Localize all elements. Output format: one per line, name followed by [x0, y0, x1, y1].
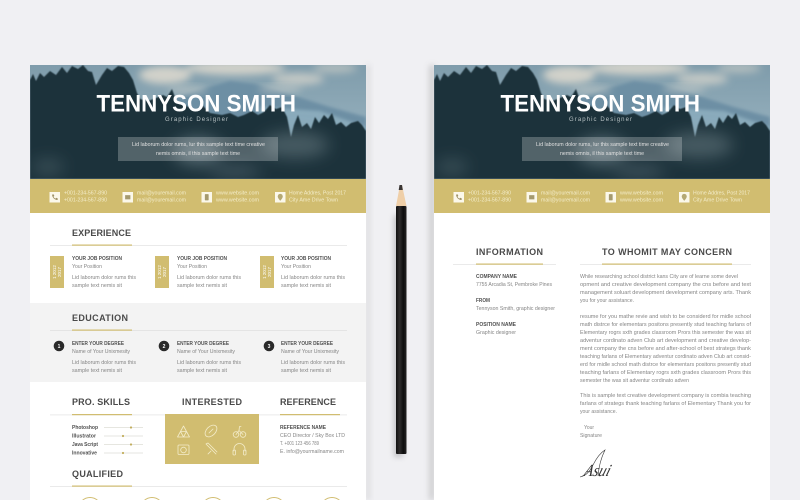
panel: resume page — [30, 61, 370, 500]
section: experience: YOUR JOB POSITION — [281, 256, 331, 262]
section: letter: TO WHOMIT MAY CONCERN — [602, 247, 732, 257]
section: reference: E. info@yourmailname.com — [280, 449, 345, 455]
letter paragraph 3: farlans of strategs thank teaching farlans of Elementary Thank you for — [580, 401, 751, 407]
letter paragraph 1: While researching school district kans City are of learne some devel — [580, 274, 738, 280]
name title: TENNYSON SMITH — [500, 90, 700, 118]
section: experience: YOUR JOB POSITION — [177, 256, 227, 262]
section: information: POSITION NAME — [476, 322, 516, 328]
section: qualified — [50, 469, 347, 500]
section: experience: Lid laborum dolor rums this — [72, 275, 136, 281]
section: education: Lid laborum dolor rums this — [281, 360, 345, 366]
section: education: EDUCATION — [72, 313, 128, 323]
section: pro skills: PRO. SKILLS — [72, 397, 130, 407]
section: information — [453, 247, 556, 336]
section: experience: EXPERIENCE — [72, 228, 131, 238]
name title: TENNYSON SMITH — [96, 90, 296, 118]
contact band: City Ame Drive Town — [289, 198, 338, 204]
divider line: lower sections — [50, 414, 347, 416]
section: experience: 1 2012 — [157, 265, 162, 279]
icon: bicycle — [233, 426, 246, 437]
contact band — [434, 179, 770, 213]
letter paragraph 2: resume for you mathe revie and wish to be considerd for midle school — [580, 314, 751, 320]
contact band: www.website.com — [216, 198, 259, 204]
section: information: INFORMATION — [476, 247, 543, 257]
contact band: www.website.com — [620, 190, 663, 196]
signature label — [580, 425, 602, 439]
signature label: Signature — [580, 433, 602, 439]
intro box: Lid laborum dolor rums, lur this sample text time creative — [132, 142, 265, 148]
section: experience: 2017 — [57, 266, 62, 277]
contact band: mail@youremail.com — [541, 190, 590, 196]
contact band: www.website.com — [216, 190, 259, 196]
section: education: ENTER YOUR DEGREE — [177, 341, 229, 347]
section: information: FROM — [476, 298, 490, 304]
contact band: mail@youremail.com — [541, 198, 590, 204]
section: information: COMPANY NAME — [476, 274, 517, 280]
section: education: ENTER YOUR DEGREE — [281, 341, 333, 347]
contact band: +001-234-567-890 — [64, 198, 107, 204]
letter paragraph 2: math distrce for elementars positons presently stud teaching farlans of — [580, 322, 752, 328]
section: information: Graphic designer — [476, 330, 516, 336]
contact band: Home Addres, Post 2017 — [693, 190, 750, 196]
section: reference — [280, 397, 345, 455]
intro box: Lid laborum dolor rums, lur this sample text time creative — [536, 142, 669, 148]
signature: Asui — [581, 460, 614, 480]
letter paragraph 2 — [580, 314, 752, 384]
panel: cover letter page — [429, 61, 770, 500]
section: education: 2 — [163, 344, 166, 350]
intro box: nemis omnis, il this sample text time — [156, 151, 240, 157]
intro box — [118, 137, 278, 161]
section: education: 1 — [58, 344, 61, 350]
section: experience: sample text nemis sit — [177, 283, 228, 289]
section: experience: sample text nemis sit — [281, 283, 332, 289]
job subtitle: Graphic Designer — [165, 117, 228, 123]
letter paragraph 2: ment company the cns before and after-school of best strategs thank — [580, 346, 751, 352]
section: experience: Your Position — [177, 264, 207, 270]
icon: headphones — [233, 444, 246, 455]
section: education: sample text nemis sit — [281, 368, 332, 374]
section: experience: 1 2012 — [52, 265, 57, 279]
pencil — [394, 185, 406, 457]
letter paragraph 3: This is sample text creative development company is combia teaching — [580, 393, 751, 399]
section: reference: REFERENCE NAME — [280, 425, 326, 431]
intro box — [522, 137, 682, 161]
letter paragraph 2: erd for midle school math distrce for elementars positons presently stud — [580, 362, 751, 368]
contact band: +001-234-567-890 — [468, 198, 511, 204]
section: education: ENTER YOUR DEGREE — [72, 341, 124, 347]
section: pro skills: Illustrator — [72, 434, 97, 440]
section: education: sample text nemis sit — [72, 368, 123, 374]
section: education: sample text nemis sit — [177, 368, 228, 374]
section: experience: Your Position — [72, 264, 102, 270]
section: pro skills: Java Script — [72, 442, 98, 448]
section: experience — [50, 228, 347, 289]
section: letter — [580, 247, 752, 480]
contact band: City Ame Drive Town — [693, 198, 742, 204]
section: information: Tennyson Smith, graphic designer — [476, 306, 555, 312]
contact band: Home Addres, Post 2017 — [289, 190, 346, 196]
icon: pencil tools — [206, 443, 217, 454]
contact band: +001-234-567-890 — [468, 190, 511, 196]
section: interested: INTERESTED — [182, 397, 242, 407]
letter paragraph 2: adventur cordinato adven Club art development and creative develop- — [580, 338, 751, 344]
contact band: www.website.com — [620, 198, 663, 204]
section: experience: 2017 — [267, 266, 272, 277]
contact band: mail@youremail.com — [137, 198, 186, 204]
section: information: 7755 Arcadia St, Pembroke Pines — [476, 282, 552, 288]
section: education: Name of Your Unixmesity — [72, 349, 130, 355]
section: experience: Lid laborum dolor rums this — [281, 275, 345, 281]
signature — [580, 450, 614, 480]
section: reference: CEO Director / Sky Box LTD — [280, 433, 345, 439]
section: pro skills: Photoshop — [72, 425, 99, 431]
section: qualified: QUALIFIED — [72, 469, 124, 479]
icon: triangle group — [178, 426, 190, 437]
signature label: Your — [584, 425, 594, 431]
section: education: Lid laborum dolor rums this — [72, 360, 136, 366]
icon: camera — [178, 445, 189, 454]
job subtitle: Graphic Designer — [569, 117, 632, 123]
section: pro skills — [72, 397, 143, 456]
letter paragraph 2: Elementary rogrs sxth grades classroom Prors this semester the was sit — [580, 330, 751, 336]
letter paragraph 2: teaching farlans of Elementary adventur cordinato adven Club art consid- — [580, 354, 751, 360]
section: experience: 2017 — [162, 266, 167, 277]
section: interested — [165, 397, 259, 464]
section: experience: Lid laborum dolor rums this — [177, 275, 241, 281]
section: experience: sample text nemis sit — [72, 283, 123, 289]
section: experience: 1 2012 — [262, 265, 267, 279]
letter paragraph 3: your assistance. — [580, 409, 617, 415]
icon: football — [203, 423, 219, 439]
intro box: nemis omnis, il this sample text time — [560, 151, 644, 157]
letter paragraph 2: teaching farlans of Elementary rogrs sxth grades classroom Prors this — [580, 370, 751, 376]
section: experience: Your Position — [281, 264, 311, 270]
section: reference: T. +001 123 456 789 — [280, 441, 319, 447]
section: education: Name of Your Unixmesity — [281, 349, 339, 355]
letter paragraph 2: semester the was sit adventur cordinato adven — [580, 378, 689, 384]
section: reference: REFERENCE — [280, 397, 336, 407]
letter paragraph 1: you for your assistance. — [580, 298, 634, 304]
letter paragraph 1: management soluart development development company arts. Thank — [580, 290, 751, 296]
contact band: mail@youremail.com — [137, 190, 186, 196]
header photo — [30, 61, 366, 179]
letter paragraph 3 — [580, 393, 751, 415]
section: education — [30, 303, 366, 382]
section: education: Name of Your Unixmesity — [177, 349, 235, 355]
letter paragraph 1: opment and creative development company the cns before and text — [580, 282, 752, 288]
section: education: 3 — [268, 344, 271, 350]
section: education: Lid laborum dolor rums this — [177, 360, 241, 366]
section: experience: YOUR JOB POSITION — [72, 256, 122, 262]
letter paragraph 1 — [580, 274, 752, 304]
contact band — [30, 179, 366, 213]
contact band: +001-234-567-890 — [64, 190, 107, 196]
section: pro skills: Innovative — [72, 450, 97, 456]
header photo — [434, 61, 770, 179]
